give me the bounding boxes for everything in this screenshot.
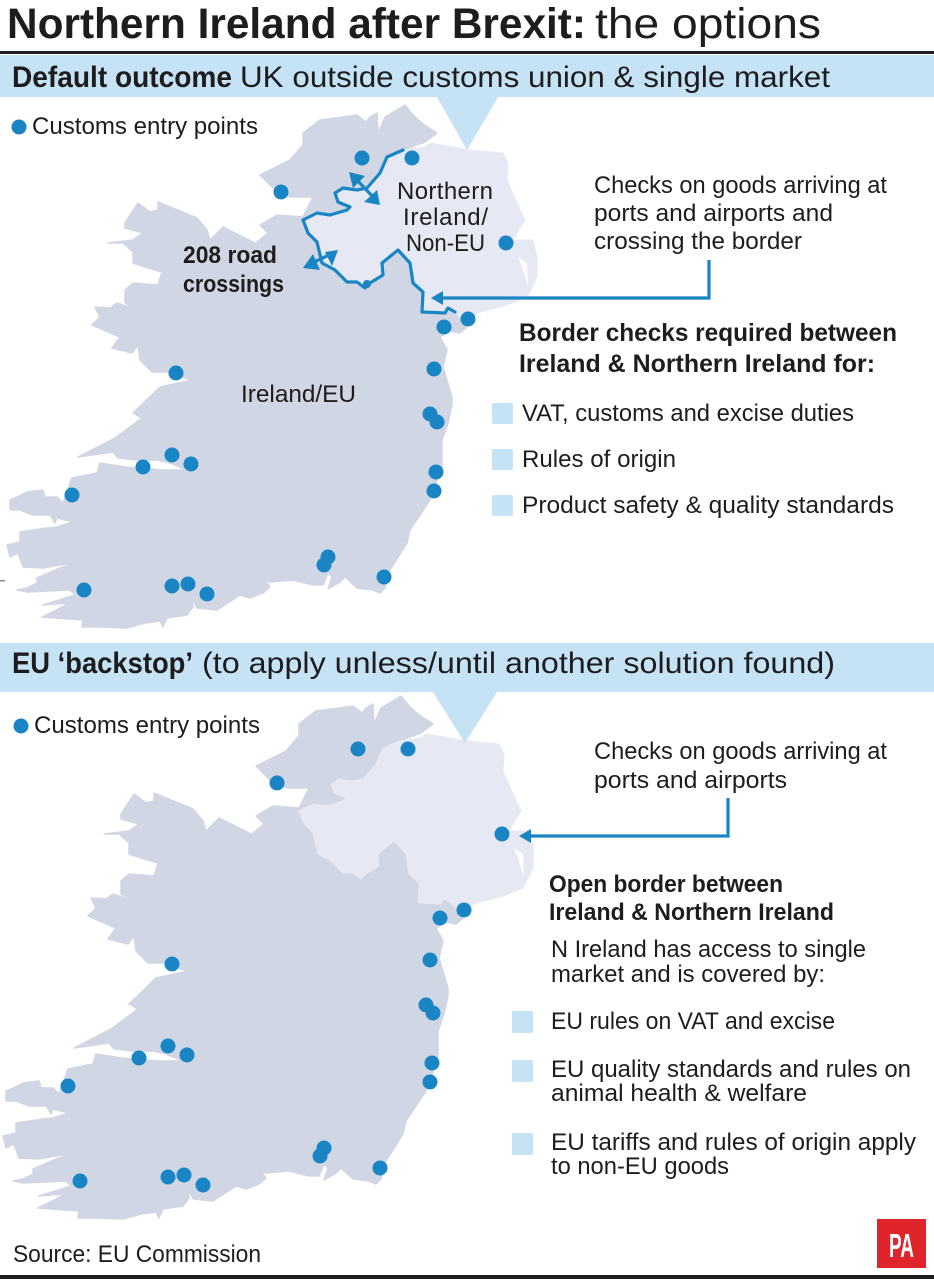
panel: EU backstop header band <box>0 643 934 743</box>
label: Ireland/EU: Ireland/EU <box>241 381 356 408</box>
map: Ireland, backstop <box>3 692 533 1219</box>
map: Ireland, default outcome <box>7 97 537 628</box>
label: Northern Ireland / Non-EU: Ireland/ <box>403 204 488 231</box>
arrows: road crossings <box>303 172 380 288</box>
panel: default outcome header band: UK outside customs union & single market <box>240 61 831 94</box>
label: Northern Ireland / Non-EU <box>397 178 493 257</box>
list: border checks: Rules of origin <box>522 446 676 473</box>
arrow: checks to ports <box>519 798 728 843</box>
panel: EU backstop header band: (to apply unless/until another solution found) <box>202 647 835 680</box>
panel: default outcome header band <box>0 55 934 150</box>
legend: customs entry points: Customs entry points <box>32 113 258 140</box>
text block: open border: Ireland & Northern Ireland <box>549 899 834 926</box>
list: EU rules: EU quality standards and rules on <box>551 1056 911 1083</box>
arrow: checks to border <box>431 260 709 305</box>
title: Northern Ireland after Brexit: <box>7 0 586 48</box>
logo: PA <box>877 1219 926 1268</box>
list: EU rules: to non-EU goods <box>551 1153 729 1180</box>
text block: open border <box>549 871 834 926</box>
callout: checks on goods (backstop): Checks on goods arriving at <box>594 738 887 765</box>
label: 208 road crossings: crossings <box>183 271 284 298</box>
panel: EU backstop header band: EU ‘backstop’ <box>12 647 193 680</box>
source: Source: EU Commission <box>13 1241 261 1268</box>
text block: border checks required: Border checks required between <box>519 319 897 347</box>
panel: default outcome header band: Default outcome <box>12 61 232 94</box>
label: 208 road crossings: 208 road <box>183 242 277 269</box>
customs entry point dots <box>64 150 514 602</box>
text block: N Ireland access <box>551 936 866 988</box>
text block: border checks required: Ireland & Northern Ireland for: <box>519 350 875 378</box>
list: EU rules: EU rules on VAT and excise <box>551 1008 835 1035</box>
list: border checks: Product safety & quality standards <box>522 492 894 519</box>
list: border checks: VAT, customs and excise duties <box>522 400 854 427</box>
customs entry point dots (backstop) <box>60 742 510 1192</box>
list: EU rules: animal health & welfare <box>551 1080 807 1107</box>
callout: checks on goods: ports and airports and <box>594 200 833 227</box>
text block: N Ireland access: market and is covered by: <box>551 961 825 988</box>
callout: checks on goods: crossing the border <box>594 228 802 255</box>
label: Northern Ireland / Non-EU: Northern <box>397 178 493 205</box>
list: EU rules: EU tariffs and rules of origin apply <box>551 1129 916 1156</box>
legend: customs entry points (backstop): Customs entry points <box>34 712 260 739</box>
text block: border checks required <box>519 319 897 378</box>
logo: PA: PA <box>889 1227 914 1264</box>
text block: N Ireland access: N Ireland has access to single <box>551 936 866 963</box>
text block: open border: Open border between <box>549 871 783 898</box>
callout: checks on goods: Checks on goods arriving at <box>594 172 887 199</box>
title: the options <box>595 0 821 48</box>
border line <box>303 150 455 313</box>
label: 208 road crossings <box>183 242 284 298</box>
list: EU rules <box>512 1008 916 1180</box>
callout: checks on goods (backstop): ports and airports <box>594 767 787 794</box>
list: border checks <box>492 400 894 519</box>
label: Northern Ireland / Non-EU: Non-EU <box>406 230 485 257</box>
callout: checks on goods (backstop) <box>594 738 887 794</box>
callout: checks on goods <box>594 172 887 255</box>
